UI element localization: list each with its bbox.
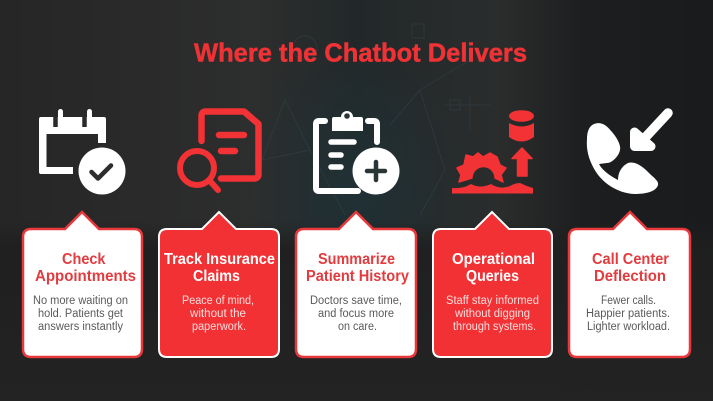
text: summarize body: and focus more bbox=[318, 308, 394, 320]
heading: operational queries bbox=[452, 251, 535, 285]
heading: call center deflection: Call Center bbox=[592, 251, 669, 268]
heading: call center deflection bbox=[592, 251, 669, 285]
text: summarize body: on care. bbox=[338, 321, 377, 333]
text: call center body: Happier patients. bbox=[586, 308, 670, 320]
heading: call center deflection: Deflection bbox=[594, 268, 666, 285]
heading: check appointments: Check bbox=[62, 251, 106, 268]
icon: incoming call bbox=[587, 113, 668, 194]
text: check appointments body: hold. Patients get bbox=[38, 308, 124, 320]
text: track insurance body: paperwork. bbox=[192, 321, 246, 333]
text: summarize body bbox=[310, 295, 402, 333]
text: operational body bbox=[446, 295, 539, 333]
heading: check appointments bbox=[35, 251, 136, 285]
text: call center body: Lighter workload. bbox=[587, 321, 670, 333]
heading: track insurance claims bbox=[164, 251, 275, 285]
text: check appointments body: No more waiting on bbox=[33, 295, 128, 307]
heading: track insurance claims: Track Insurance bbox=[164, 251, 275, 268]
panel: check appointments bbox=[23, 212, 142, 357]
heading: summarize patient history: Patient History bbox=[306, 268, 409, 285]
heading: track insurance claims: Claims bbox=[193, 268, 240, 285]
text: operational body: through systems. bbox=[453, 321, 536, 333]
text: check appointments body: answers instantly bbox=[38, 321, 123, 333]
icon: clipboard with plus bbox=[316, 111, 400, 194]
text: call center body: Fewer calls. bbox=[601, 295, 656, 307]
title: Where the Chatbot Delivers bbox=[194, 38, 527, 68]
heading: summarize patient history: Summarize bbox=[318, 251, 395, 268]
panel: call center deflection bbox=[569, 212, 690, 357]
heading: operational queries: Operational bbox=[452, 251, 535, 268]
icon: calendar with check bbox=[39, 109, 126, 194]
panel: track insurance claims bbox=[159, 212, 279, 357]
text: operational body: Staff stay informed bbox=[446, 295, 539, 307]
icon: gear, database and arrow bbox=[452, 110, 534, 194]
heading: summarize patient history bbox=[306, 251, 409, 285]
panel: operational queries bbox=[433, 212, 552, 357]
text: operational body: without digging bbox=[454, 308, 530, 320]
text: track insurance body bbox=[182, 295, 254, 333]
text: track insurance body: Peace of mind, bbox=[182, 295, 254, 307]
text: track insurance body: without the bbox=[189, 308, 246, 320]
heading: operational queries: Queries bbox=[466, 268, 519, 285]
panel: summarize patient history bbox=[296, 212, 416, 357]
text: call center body bbox=[586, 295, 670, 333]
heading: check appointments: Appointments bbox=[35, 268, 136, 285]
icon: document with magnifier bbox=[180, 112, 258, 190]
text: check appointments body bbox=[33, 295, 128, 333]
text: summarize body: Doctors save time, bbox=[310, 295, 402, 307]
